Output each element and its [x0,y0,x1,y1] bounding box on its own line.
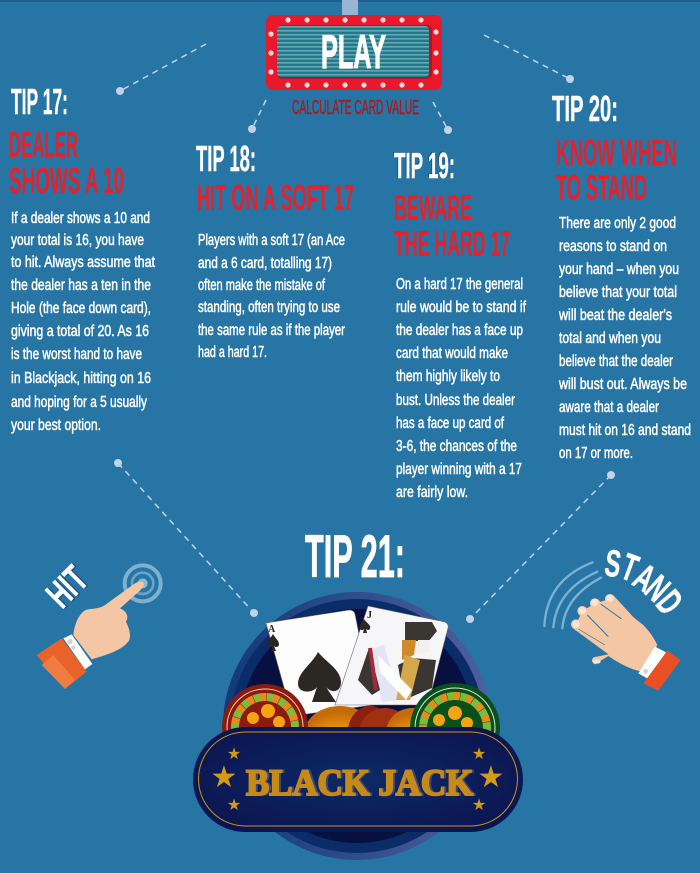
tip 17: giving a total of 20. As 16 [11,323,149,340]
tip 18: had a hard 17. [198,344,267,361]
label: stand: T [616,544,644,590]
label: hit: HIT [41,558,99,616]
banner: ★ [227,797,241,814]
tip 20: TIP 20: [552,88,618,129]
banner: ★ [478,761,504,794]
tip 20: reasons to stand on [559,238,667,255]
tip 20: will beat the dealer's [558,307,672,324]
tip 17: is the worst hand to have [11,346,142,363]
tip 17: SHOWS A 10 [9,160,124,201]
tip 18: TIP 18: [196,138,256,179]
card: ace of spades [266,610,373,716]
tip 17: your best option. [11,417,101,434]
tip 17: If a dealer shows a 10 and [11,210,150,227]
card: ace of spades: A [268,624,276,635]
tip 21 heading: TIP 21: [305,523,405,590]
tip 17: TIP 17: [11,81,68,122]
tip 19: rule would be to stand if [396,299,527,316]
label: hit: HIT [39,558,97,616]
tip 20: on 17 or more. [559,445,633,462]
chip: red [222,684,308,770]
tip 19: THE HARD 17 [394,223,510,264]
tip 19: On a hard 17 the general [396,276,523,293]
tip 17: DEALER [9,124,78,165]
label: stand: S [602,541,624,586]
banner title: BLACK JACK [246,763,473,804]
tip 19: player winning with a 17 [396,461,522,478]
tip 20: aware that a dealer [559,399,659,416]
icon: stand hand [544,562,681,691]
label: stand: A [626,554,664,600]
connector lines [114,35,615,623]
badge backdrop circle [223,592,491,860]
tip 19: TIP 19: [393,144,454,185]
tip 17 [9,81,156,434]
tip 19: are fairly low. [396,484,468,501]
label: hit [39,557,99,617]
tip 17: in Blackjack, hitting on 16 [11,370,151,387]
tip 19: them highly likely to [396,368,500,385]
banner: ★ [227,746,241,763]
banner [193,727,523,832]
tip 19: 3-6, the chances of the [396,438,517,455]
tip 17: and hoping for a 5 usually [11,394,147,411]
tip 19: BEWARE [394,187,472,228]
tip 19: card that would make [396,345,508,362]
tip 20: total and when you [559,330,661,347]
card: jack of spades [335,606,448,705]
tip 18: standing, often trying to use [198,299,340,316]
tip 19 [393,144,527,501]
tip 17: Hole (the face down card), [11,300,151,317]
banner: ★ [211,761,237,794]
tip 17: your total is 16, you have [11,232,144,249]
tip 18 [196,138,354,361]
tip 19: bust. Unless the dealer [396,392,515,409]
tip 19: has a face up card of [396,415,505,432]
tip 18: the same rule as if the player [198,322,345,339]
icon: hit hand [37,565,161,689]
label: stand [602,541,692,623]
tip 19: the dealer has a face up [396,322,523,339]
tip 17: to hit. Always assume that [11,254,156,271]
tip 17: the dealer has a ten in the [11,277,151,294]
card: jack of spades: J [367,610,372,621]
tip 18: HIT ON A SOFT 17 [197,177,354,218]
chip: green [410,683,500,773]
tip 19: TIP 19: [394,145,455,186]
subtitle: calculate card value: CALCULATE CARD VALUE [292,97,419,119]
label: stand: N [637,566,679,610]
blackjack badge [193,592,523,860]
banner title: BLACK JACK [248,763,475,804]
tip 20 [552,88,691,462]
tip 18: Players with a soft 17 (an Ace [198,232,345,249]
tip 18: often make the mistake of [198,277,325,294]
gold chips [305,706,438,758]
banner: ★ [472,746,486,763]
label: stand: D [648,582,692,623]
marquee sign: play [266,0,442,90]
tip 18: and a 6 card, totalling 17) [198,255,332,272]
banner: ★ [472,797,486,814]
marquee sign: play: PLAY [321,25,386,78]
